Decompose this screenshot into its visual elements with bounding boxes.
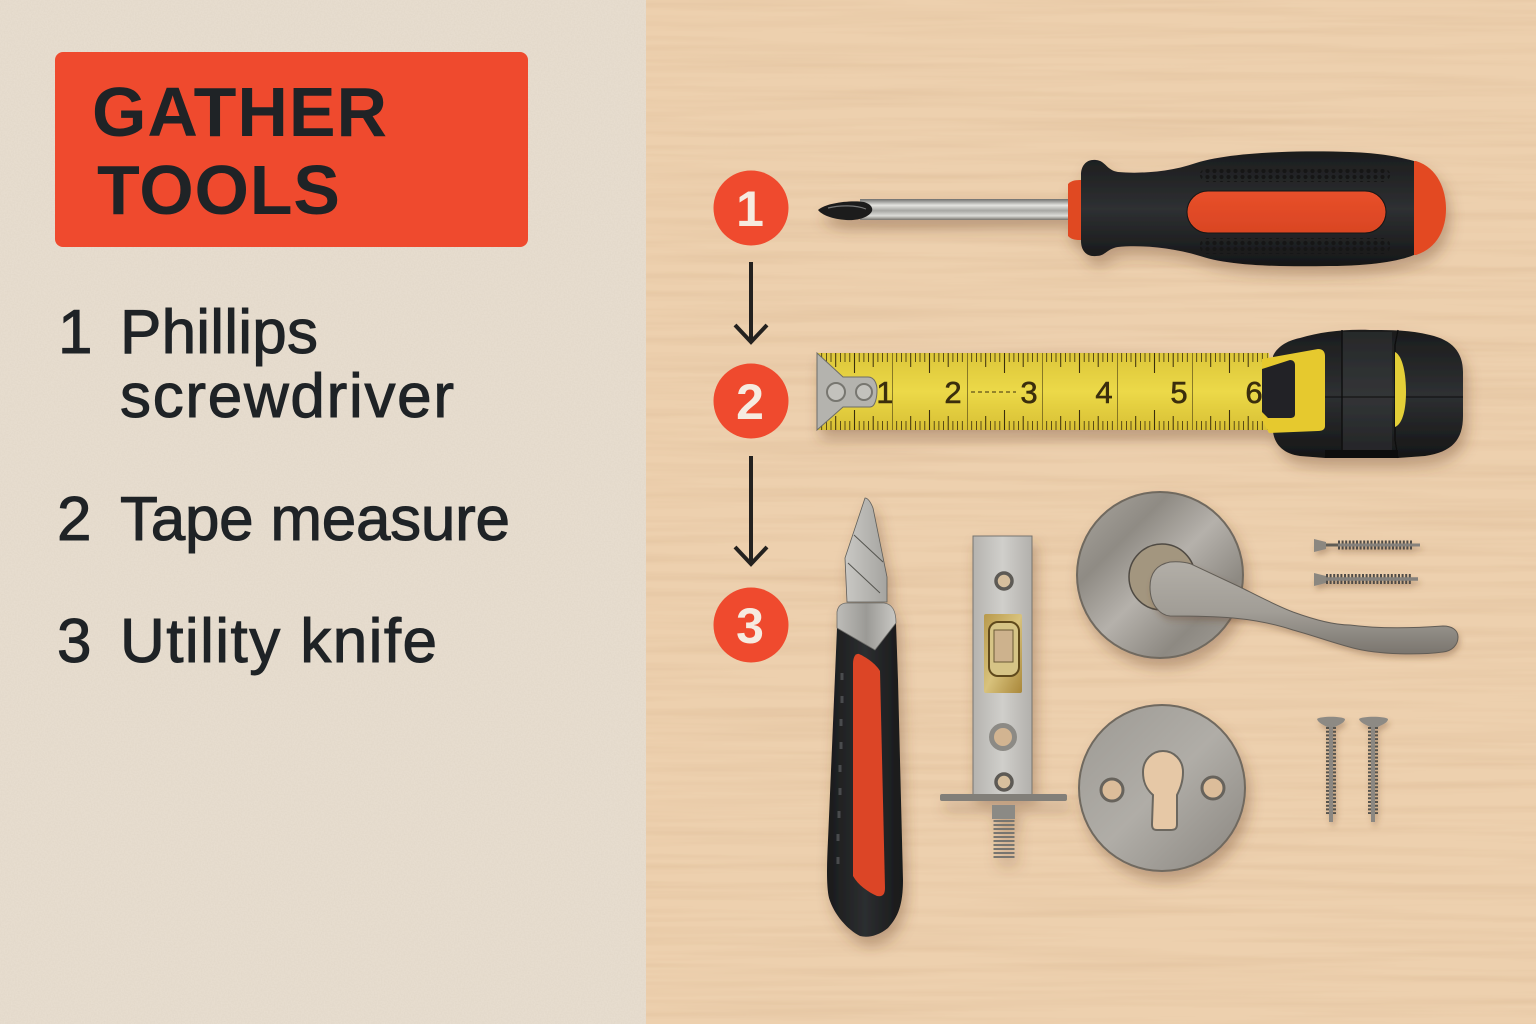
- tool: tape measure: 6: [1245, 375, 1263, 410]
- list item 3: 3: [57, 607, 91, 676]
- list item 1: Phillips: [120, 298, 318, 367]
- arrow: step 1 to 2: [735, 262, 767, 342]
- step badge 1: [714, 170, 788, 246]
- step badge 3: [714, 588, 788, 662]
- step badge 3: 3: [736, 598, 764, 654]
- step badge 2: [714, 364, 788, 438]
- tool: mortise latch: [940, 536, 1067, 860]
- tool: keyhole escutcheon: [1079, 705, 1245, 871]
- tool: tape measure: 3: [1020, 375, 1038, 410]
- step badge 2: 2: [736, 374, 764, 430]
- tool: tape measure: 4: [1095, 375, 1113, 410]
- title banner: TOOLS: [97, 151, 340, 229]
- list item 3: Utility knife: [120, 607, 437, 676]
- arrow: step 2 to 3: [735, 456, 767, 564]
- icon: vertical screws: [1317, 717, 1388, 822]
- panel: wood surface: [646, 0, 1536, 1024]
- tool: tape measure: 2: [944, 375, 962, 410]
- panel: left text panel: [0, 0, 646, 1024]
- tool: door lever on rose: [1077, 492, 1458, 658]
- title banner: [55, 52, 528, 247]
- list item 1: screwdriver: [120, 362, 454, 431]
- list item 2: 2: [57, 485, 91, 554]
- title banner: GATHER: [92, 73, 387, 151]
- tool: Phillips screwdriver: [818, 151, 1446, 266]
- tool: utility knife: [827, 498, 903, 937]
- step badge 1: 1: [736, 181, 764, 237]
- tool: tape measure: 5: [1170, 375, 1188, 410]
- list item 1: 1: [58, 298, 92, 367]
- icon: horizontal screws: [1314, 539, 1420, 586]
- tool: tape measure: 1: [876, 375, 894, 410]
- list item 2: Tape measure: [120, 485, 510, 554]
- list item 1: [58, 298, 454, 431]
- tool: tape measure: [817, 330, 1463, 458]
